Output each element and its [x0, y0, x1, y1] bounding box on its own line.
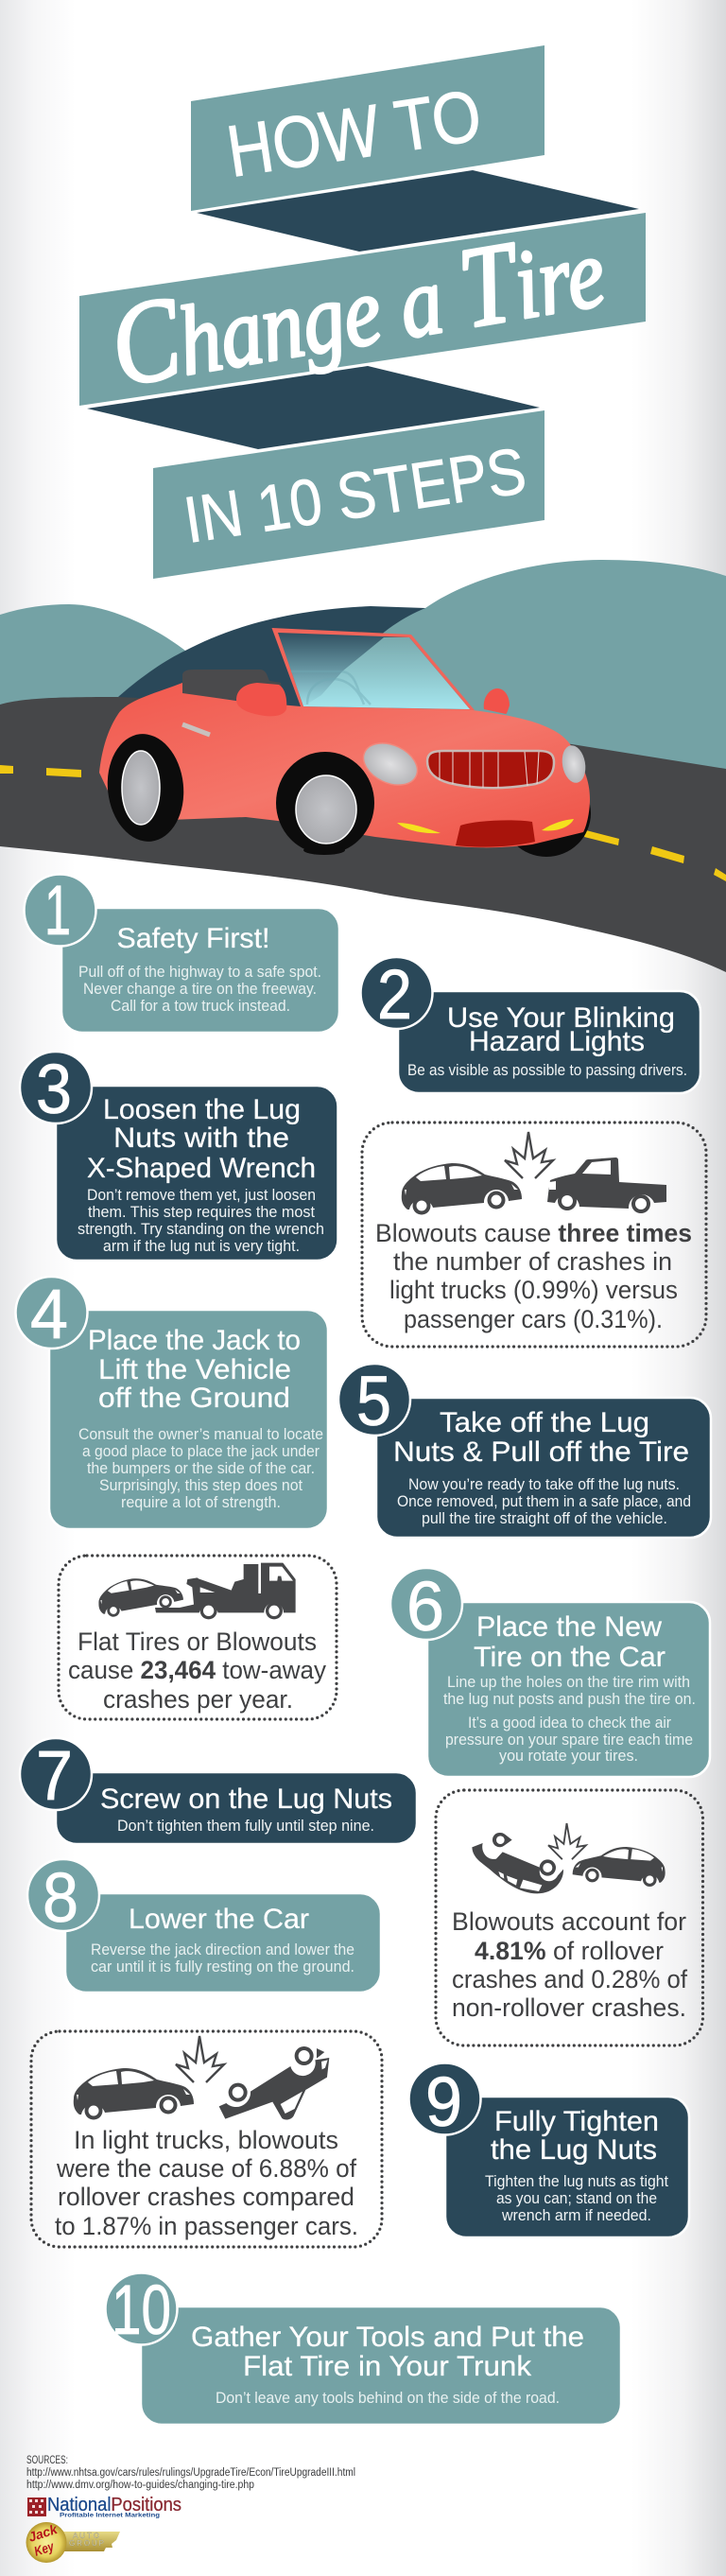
icon: burst — [548, 1823, 586, 1859]
step 3: loosen the lug nuts: Nuts with the — [113, 1123, 289, 1154]
step 3: loosen the lug nuts: arm if the lug nut is very tight. — [103, 1237, 300, 1255]
callout: rollover share: Blowouts account for — [452, 1907, 686, 1936]
logo: national positions: Profitable Internet Marketing — [60, 2512, 160, 2519]
step 7: screw on the lug nuts: 7 — [36, 1736, 73, 1815]
hero: hills and road — [0, 560, 726, 972]
step 6: place the new tire: pressure on your spare tire each time — [445, 1731, 693, 1749]
step 3: loosen the lug nuts: X-Shaped Wrench — [87, 1153, 316, 1184]
sources: http://www.dmv.org/how-to-guides/changing-tire.php — [26, 2480, 254, 2491]
callout: rollover share — [436, 1790, 703, 2045]
icon: towed car — [96, 1575, 184, 1618]
step 6: place the new tire: you rotate your tires. — [499, 1747, 638, 1765]
step 10: gather your tools: 10 — [112, 2271, 171, 2349]
title: ribbon banner — [79, 45, 646, 579]
callout: light trucks rollover: In light trucks, blowouts — [74, 2126, 338, 2154]
callout: light trucks rollover: rollover crashes compared — [58, 2183, 354, 2211]
step 7: screw on the lug nuts: Screw on the Lug Nuts — [100, 1784, 392, 1815]
callout: three times crashes: Blowouts cause three times — [375, 1219, 692, 1247]
logo: jack key auto group: Key — [32, 2538, 57, 2559]
step 10: gather your tools — [106, 2271, 621, 2425]
icon: burst — [176, 2036, 224, 2082]
step 6: place the new tire — [390, 1567, 710, 1777]
step 2: hazard lights: Be as visible as possible to passing drivers. — [407, 1061, 687, 1079]
icon: pickup truck — [547, 1157, 666, 1213]
callout: light trucks rollover: were the cause of 6.88% of — [56, 2154, 356, 2183]
step 7: screw on the lug nuts: Don’t tighten them fully until step nine. — [117, 1817, 374, 1835]
title: ribbon banner: Change a Tire — [102, 201, 613, 412]
step 8: lower the car: 8 — [43, 1858, 78, 1937]
callout: tow-away crashes: Flat Tires or Blowouts — [78, 1627, 317, 1656]
step 10: gather your tools: Gather Your Tools and Put the — [191, 2322, 584, 2353]
step 1: safety first: Call for a tow truck instead. — [111, 997, 290, 1015]
logo: jack key auto group: AUTO — [73, 2532, 99, 2540]
step 4: place the jack: Place the Jack to — [88, 1325, 301, 1356]
icon: burst — [505, 1132, 553, 1178]
step 3: loosen the lug nuts: them. This step requires the most — [88, 1203, 315, 1221]
step 8: lower the car: Reverse the jack direction and lower the — [91, 1941, 354, 1958]
step 9: fully tighten: wrench arm if needed. — [501, 2206, 651, 2224]
step 9: fully tighten: 9 — [425, 2063, 462, 2141]
step 3: loosen the lug nuts: Don’t remove them yet, just loosen — [87, 1186, 316, 1204]
step 8: lower the car: car until it is fully resting on the ground. — [91, 1958, 354, 1976]
step 4: place the jack: Lift the Vehicle — [98, 1354, 291, 1385]
step 10: gather your tools: Don’t leave any tools behind on the side of the road. — [216, 2389, 560, 2407]
step 9: fully tighten: Tighten the lug nuts as tight — [485, 2172, 668, 2190]
callout: light trucks rollover — [31, 2031, 382, 2247]
sources: SOURCES: — [26, 2455, 68, 2466]
illustration: red convertible car — [99, 628, 591, 857]
title: ribbon banner: IN 10 STEPS — [180, 434, 530, 557]
step 2: hazard lights: 2 — [377, 955, 412, 1034]
callout: rollover share: 4.81% of rollover — [475, 1937, 664, 1965]
logo: jack key auto group: GROUP — [69, 2539, 104, 2548]
icon: tow truck — [155, 1563, 296, 1619]
callout: tow-away crashes — [59, 1556, 337, 1719]
callout: three times crashes — [362, 1123, 706, 1347]
icon: car — [573, 1847, 666, 1887]
icon: car — [74, 2068, 194, 2120]
step 1: safety first: Pull off of the highway to a safe spot. — [78, 963, 321, 981]
step 3: loosen the lug nuts: Loosen the Lug — [103, 1094, 301, 1125]
step 7: screw on the lug nuts — [20, 1736, 417, 1844]
step 1: safety first: Safety First! — [117, 923, 270, 954]
callout: tow-away crashes: crashes per year. — [103, 1685, 293, 1714]
callout: rollover share: crashes and 0.28% of — [452, 1965, 687, 1993]
step 1: safety first: 1 — [44, 871, 71, 949]
step 2: hazard lights — [361, 955, 700, 1093]
step 6: place the new tire: the lug nut posts and push the tire on. — [443, 1690, 696, 1708]
logo: jack key auto group: Jack — [26, 2521, 60, 2545]
step 8: lower the car: Lower the Car — [129, 1904, 309, 1935]
step 2: hazard lights: Use Your Blinking — [447, 1002, 675, 1034]
step 4: place the jack: 4 — [30, 1275, 68, 1353]
step 8: lower the car — [27, 1858, 381, 1993]
step 3: loosen the lug nuts: strength. Try standing on the wrench — [78, 1220, 324, 1238]
step 4: place the jack: off the Ground — [98, 1383, 290, 1414]
icon: car — [402, 1163, 522, 1214]
title: ribbon banner: HOW TO — [222, 75, 487, 193]
callout: light trucks rollover: to 1.87% in passenger cars. — [55, 2212, 358, 2240]
step 4: place the jack: Consult the owner’s manual to locate — [78, 1425, 323, 1443]
step 4: place the jack: the bumpers or the side of the car. — [87, 1459, 315, 1477]
callout: three times crashes: the number of crashes in — [393, 1247, 672, 1276]
icon: flipped car — [219, 2046, 329, 2119]
sources: http://www.nhtsa.gov/cars/rules/rulings/UpgradeTire/Econ/TireUpgradeIII.html — [26, 2467, 355, 2479]
step 9: fully tighten: Fully Tighten — [494, 2106, 659, 2137]
step 4: place the jack: a good place to place the jack under — [82, 1442, 320, 1460]
step 5: take off the lug nuts: Once removed, put them in a safe place, and — [397, 1492, 691, 1510]
logo: national positions: NationalPositions — [47, 2495, 182, 2515]
icon: flipped car — [472, 1833, 563, 1893]
step 6: place the new tire: It’s a good idea to check the air — [468, 1714, 671, 1732]
step 4: place the jack: require a lot of strength. — [121, 1493, 281, 1511]
callout: tow-away crashes: cause 23,464 tow-away — [68, 1656, 326, 1684]
step 6: place the new tire: Place the New — [476, 1611, 663, 1643]
step 6: place the new tire: Tire on the Car — [474, 1642, 666, 1673]
step 3: loosen the lug nuts: 3 — [36, 1050, 72, 1128]
logo: jack key auto group — [26, 2521, 120, 2563]
step 6: place the new tire: Line up the holes on the tire rim with — [447, 1673, 690, 1691]
step 5: take off the lug nuts: 5 — [356, 1362, 391, 1440]
callout: rollover share: non-rollover crashes. — [452, 1993, 686, 2022]
step 1: safety first: Never change a tire on the freeway. — [83, 980, 317, 998]
callout: three times crashes: light trucks (0.99%) versus — [389, 1276, 678, 1304]
step 4: place the jack: Surprisingly, this step does not — [99, 1476, 302, 1494]
step 5: take off the lug nuts: Nuts & Pull off the Tire — [393, 1436, 689, 1468]
step 4: place the jack — [15, 1275, 328, 1529]
step 1: safety first — [25, 871, 339, 1033]
step 10: gather your tools: Flat Tire in Your Trunk — [243, 2351, 531, 2382]
step 5: take off the lug nuts: pull the tire straight off of the vehicle. — [422, 1509, 667, 1527]
step 5: take off the lug nuts — [338, 1362, 711, 1538]
callout: three times crashes: passenger cars (0.31%). — [404, 1305, 663, 1333]
step 3: loosen the lug nuts — [20, 1050, 338, 1261]
step 5: take off the lug nuts: Take off the Lug — [440, 1407, 649, 1438]
step 9: fully tighten — [408, 2063, 689, 2237]
step 9: fully tighten: as you can; stand on the — [496, 2189, 657, 2207]
step 6: place the new tire: 6 — [406, 1567, 444, 1645]
step 9: fully tighten: the Lug Nuts — [491, 2134, 657, 2166]
step 5: take off the lug nuts: Now you’re ready to take off the lug nuts. — [408, 1475, 680, 1493]
sources — [26, 2455, 355, 2491]
step 2: hazard lights: Hazard Lights — [469, 1026, 645, 1057]
